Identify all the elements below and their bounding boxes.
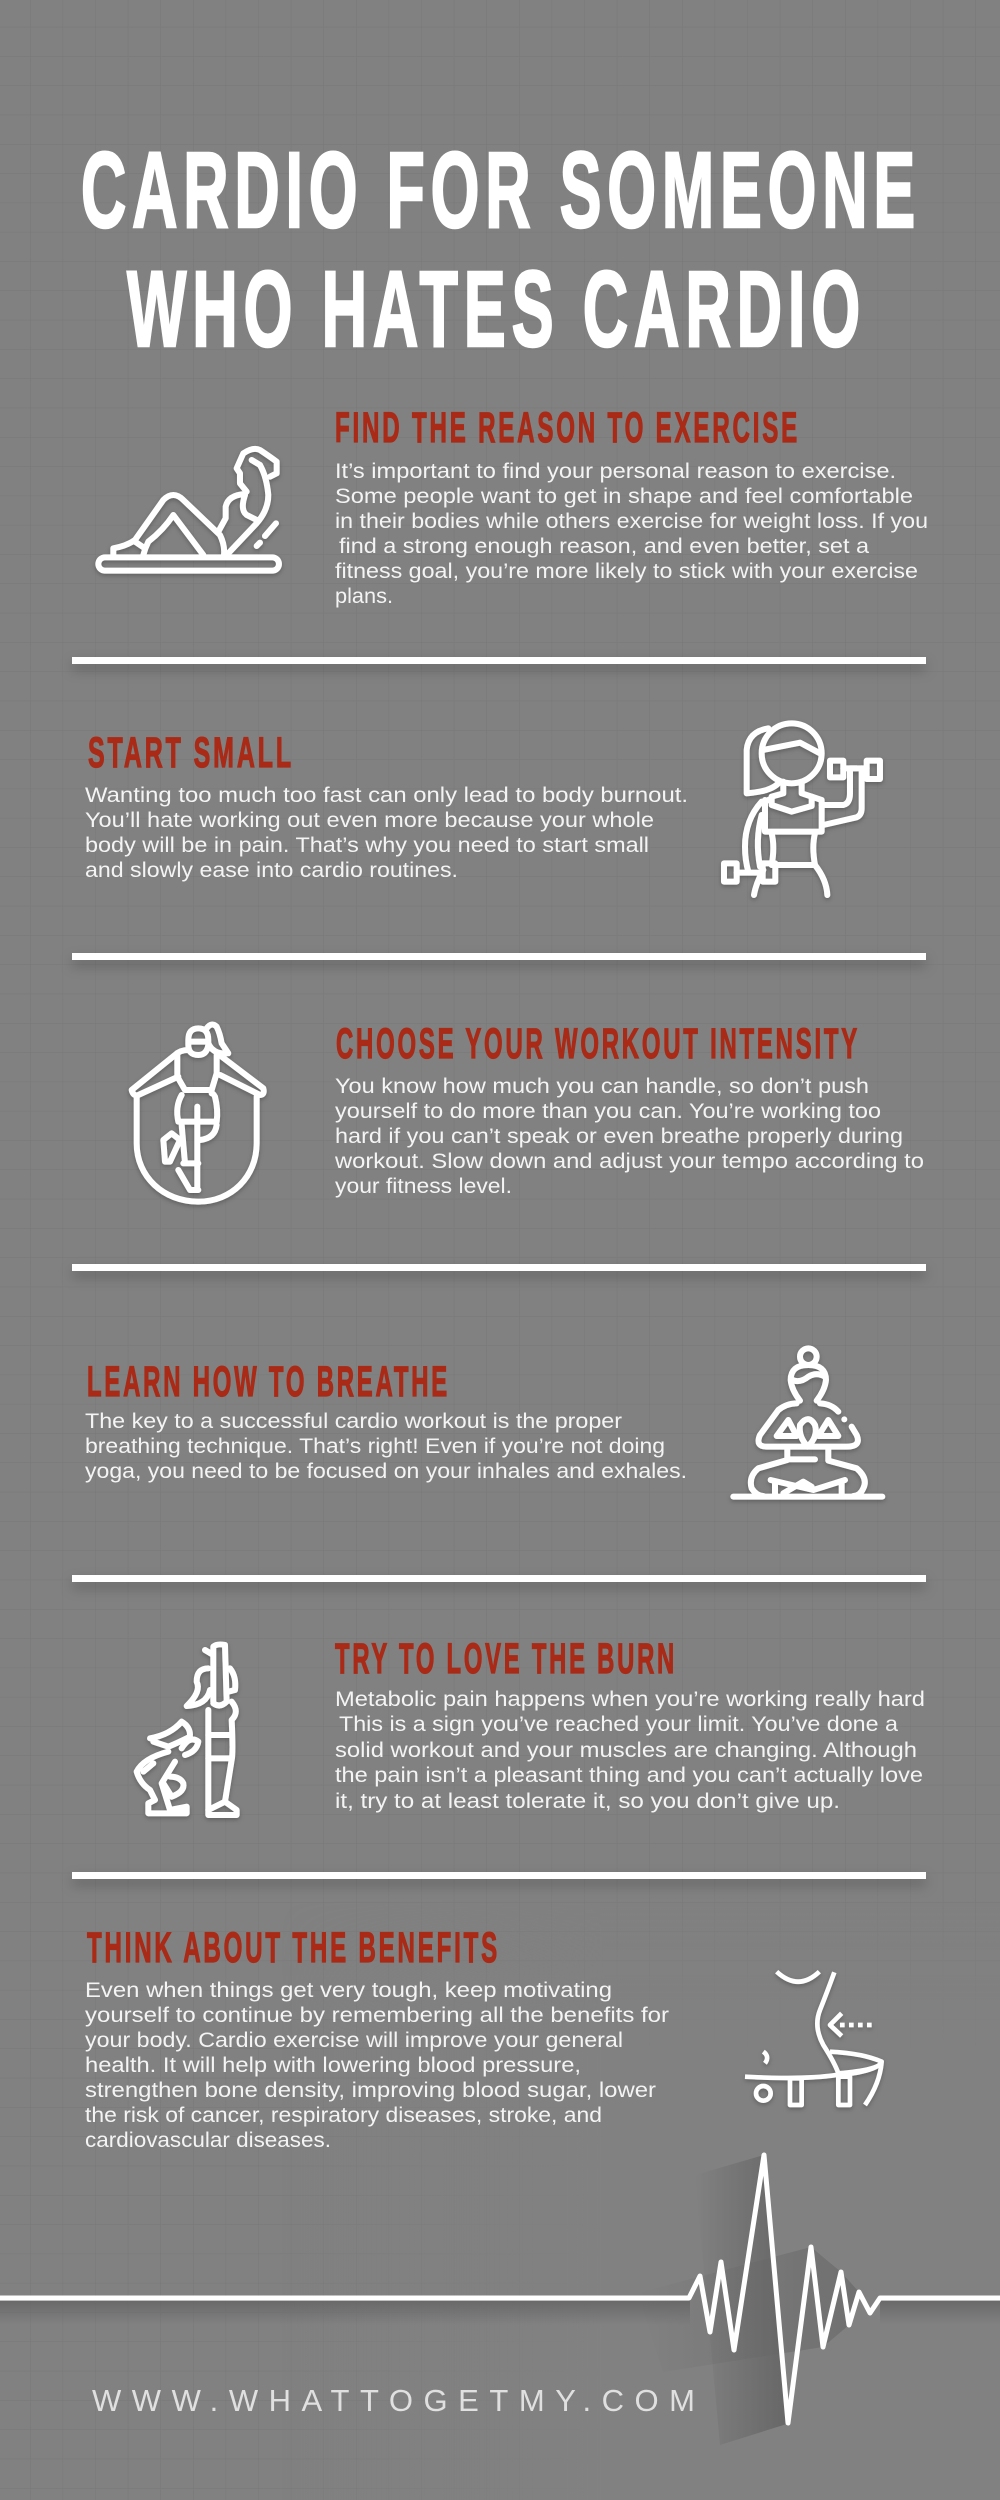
text block: [85, 1979, 669, 2152]
text block: health. It will help with lowering blood pressure,: [85, 2054, 581, 2077]
text block: Even when things get very tough, keep motivating: [85, 1979, 612, 2002]
text block: The key to a successful cardio workout is the proper: [85, 1410, 622, 1433]
text block: You’ll hate working out even more because your whole: [85, 809, 654, 832]
panel: start small: [85, 723, 880, 895]
text block: body will be in pain. That’s why you need to start small: [85, 834, 649, 857]
heading: LEARN HOW TO BREATHE: [87, 1358, 450, 1406]
text block: You know how much you can handle, so don’t push: [335, 1075, 869, 1098]
text block: This is a sign you’ve reached your limit. You’ve done a: [339, 1713, 898, 1736]
text block: fitness goal, you’re more likely to stick with your exercise: [335, 560, 918, 583]
text block: [85, 1410, 687, 1483]
heartbeat line: [0, 2155, 1000, 2445]
panel: find the reason: [98, 404, 928, 608]
text block: in their bodies while others exercise for weight loss. If you: [335, 510, 928, 533]
text block: [335, 1688, 925, 1813]
text block: Metabolic pain happens when you’re working really hard: [335, 1688, 925, 1711]
panel: learn how to breathe: [85, 1348, 882, 1497]
text block: it, try to at least tolerate it, so you don’t give up.: [335, 1790, 840, 1813]
icon: two women stretching: [137, 1644, 237, 1815]
text block: your body. Cardio exercise will improve your general: [85, 2029, 623, 2052]
heading: THINK ABOUT THE BENEFITS: [87, 1924, 500, 1972]
text block: and slowly ease into cardio routines.: [85, 859, 458, 882]
text block: [335, 460, 928, 608]
text block: yourself to continue by remembering all the benefits for: [85, 2004, 669, 2027]
icon: sit-up: [98, 449, 279, 571]
panel: choose your workout intensity: [132, 1020, 924, 1202]
panel: think about the benefits: [85, 1924, 882, 2152]
text block: workout. Slow down and adjust your tempo according to: [334, 1150, 924, 1173]
text block: [85, 784, 688, 882]
text block: the pain isn’t a pleasant thing and you can’t actually love: [335, 1764, 923, 1787]
heading: TRY TO LOVE THE BURN: [335, 1635, 677, 1683]
text block: strengthen bone density, improving blood sugar, lower: [85, 2079, 656, 2102]
text block: plans.: [335, 585, 393, 608]
heading: START SMALL: [88, 729, 294, 777]
text block: solid workout and your muscles are changing. Although: [335, 1739, 917, 1762]
text block: It’s important to find your personal reason to exercise.: [335, 460, 896, 483]
icon: meditating woman: [733, 1348, 882, 1497]
text block: find a strong enough reason, and even better, set a: [339, 535, 869, 558]
panel: try to love the burn: [137, 1635, 925, 1815]
text block: cardiovascular diseases.: [85, 2129, 331, 2152]
text block: breathing technique. That’s right! Even if you’re not doing: [85, 1435, 665, 1458]
text block: Some people want to get in shape and feel comfortable: [335, 485, 913, 508]
text block: yourself to do more than you can. You’re working too: [335, 1100, 881, 1123]
icon: jump rope: [132, 1025, 264, 1202]
text block: hard if you can’t speak or even breathe properly during: [335, 1125, 903, 1148]
text block: your fitness level.: [335, 1175, 512, 1198]
icon: woman with dumbbells: [724, 723, 880, 895]
text block: Wanting too much too fast can only lead to body burnout.: [85, 784, 688, 807]
text block: [334, 1075, 924, 1198]
website url: WWW.WHATTOGETMY.COM: [92, 2383, 695, 2418]
title: [81, 129, 921, 369]
text block: the risk of cancer, respiratory diseases, stroke, and: [85, 2104, 602, 2127]
icon: waist with arrow: [745, 1972, 882, 2105]
text block: yoga, you need to be focused on your inhales and exhales.: [85, 1460, 687, 1483]
